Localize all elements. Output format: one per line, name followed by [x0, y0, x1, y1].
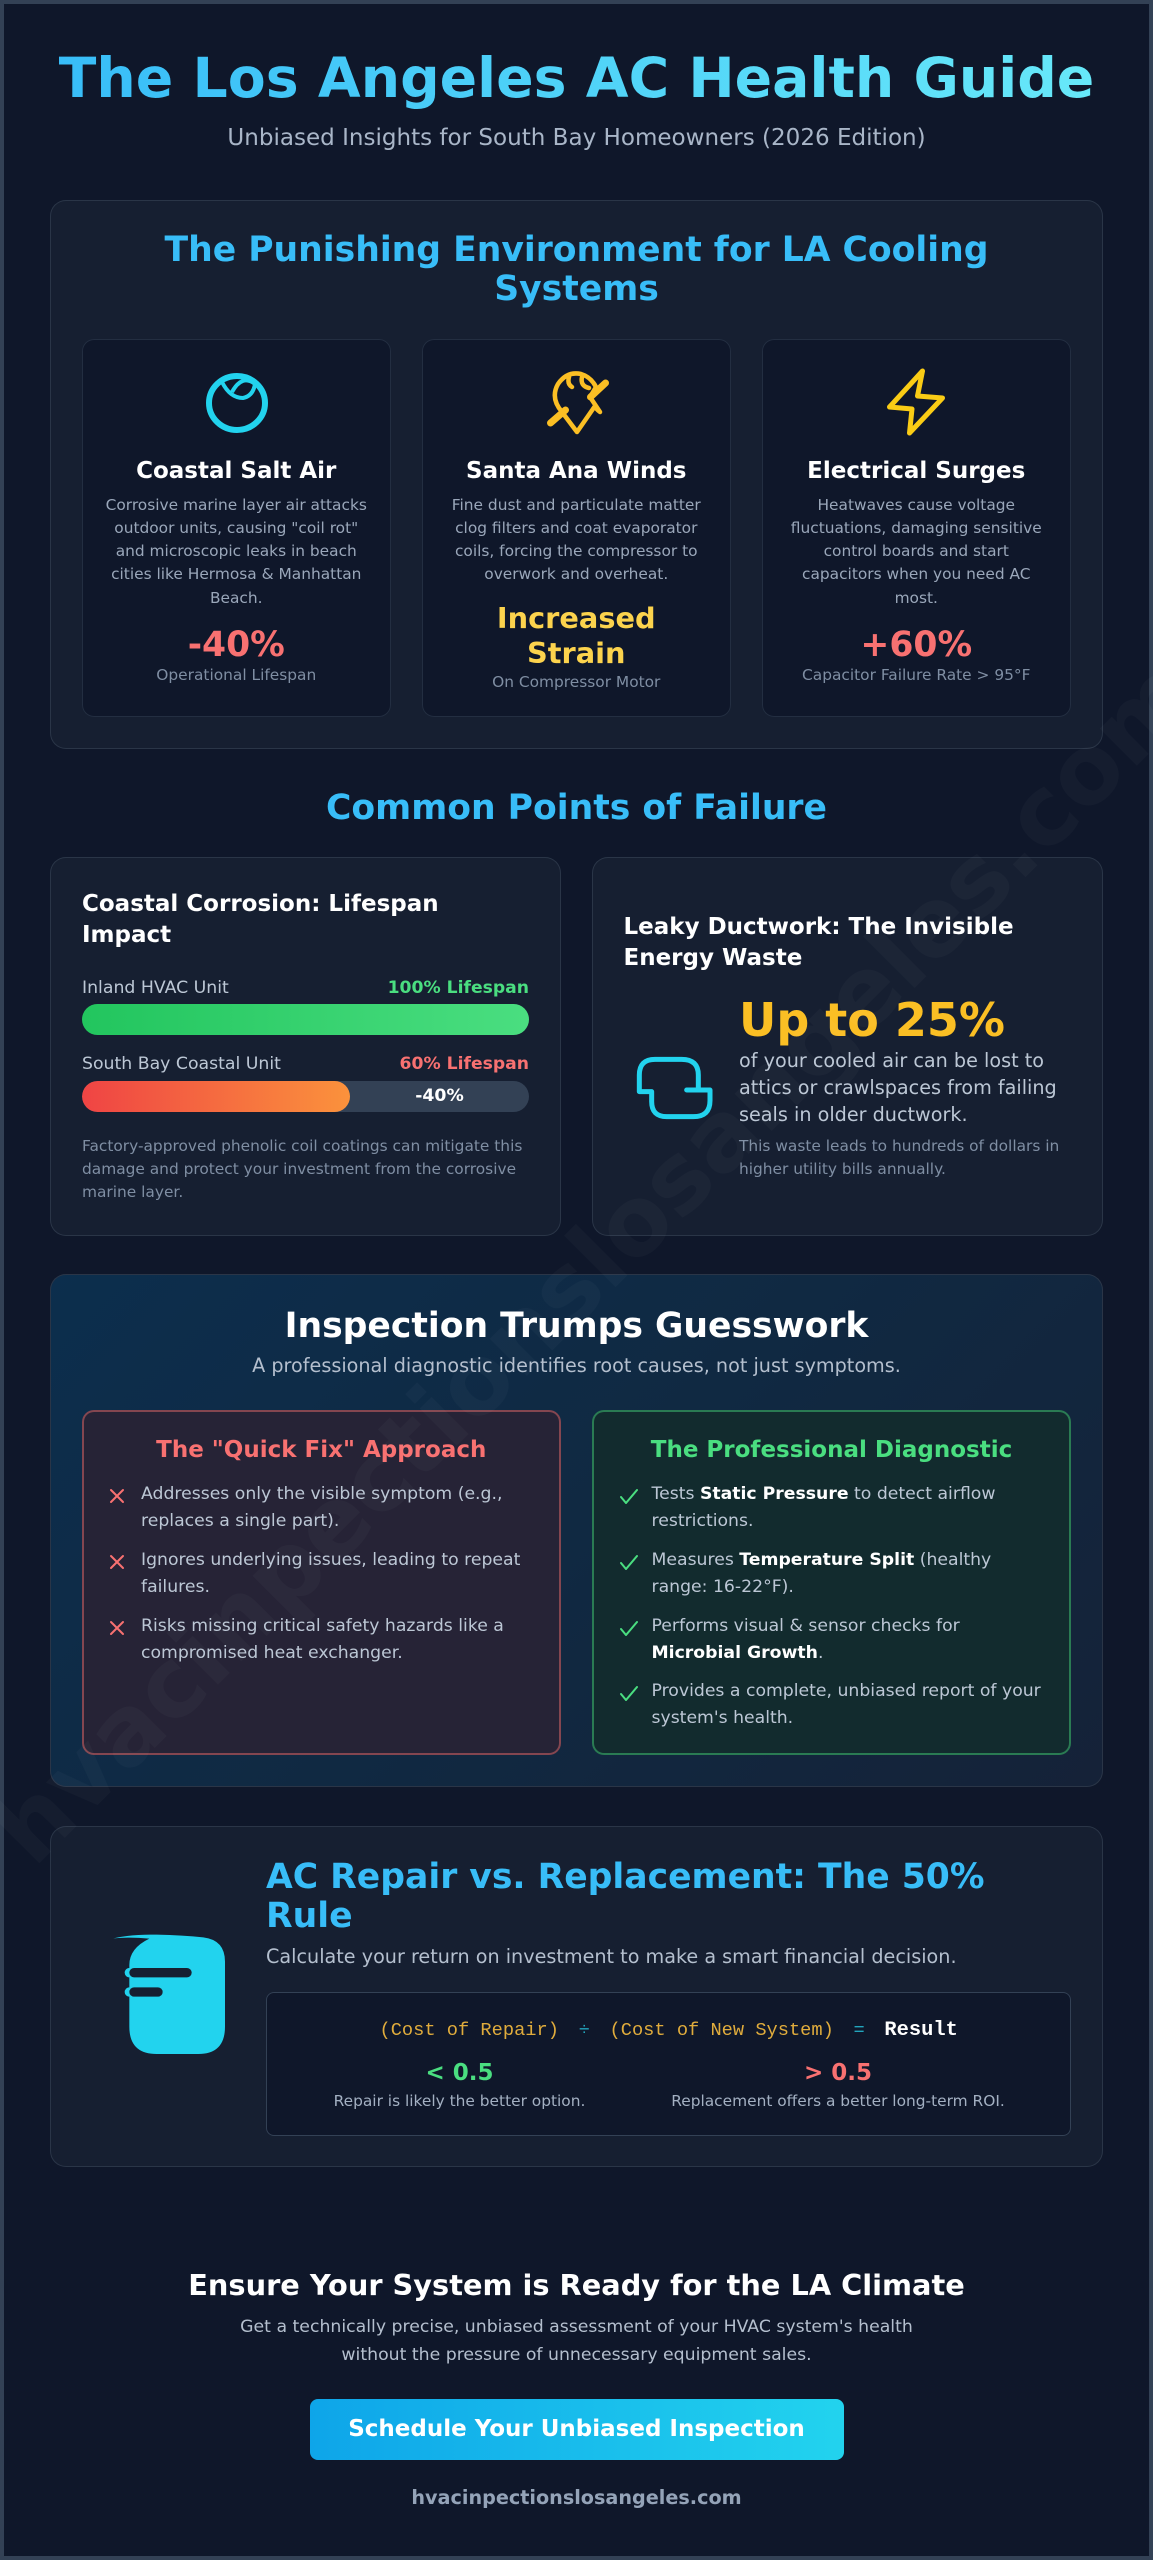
card: professional diagnostic: [592, 1410, 1071, 1755]
item: Tests Static Pressure to detect airflow: [652, 1484, 995, 1504]
value: < 0.5: [425, 2060, 494, 2086]
icon: money / calculator: [114, 1934, 225, 2054]
card title: Electrical Surges: [807, 458, 1025, 484]
card description: capacitors when you need AC: [802, 565, 1030, 583]
card description: fluctuations, damaging sensitive: [791, 519, 1042, 537]
bar label: inland: Inland HVAC Unit: [82, 978, 229, 998]
stat: Increased: [497, 601, 656, 635]
stat: [497, 601, 656, 670]
icon: lightning bolt: [887, 368, 945, 436]
item: restrictions.: [652, 1511, 753, 1531]
card: santa ana winds: [422, 339, 730, 717]
card description: Corrosive marine layer air attacks: [106, 496, 367, 514]
panel: leaky ductwork: [592, 857, 1103, 1236]
description: seals in older ductwork.: [739, 1103, 968, 1126]
item: [620, 1681, 1041, 1728]
heading: punishing environment: [164, 230, 988, 309]
card description: and microscopic leaks in beach: [116, 542, 357, 560]
description: of your cooled air can be lost to: [739, 1049, 1044, 1072]
bar: south bay 60%: [82, 1081, 529, 1112]
heading: punishing environment: The Punishing Environment for LA Cooling: [164, 230, 988, 270]
panel: inspection trumps guesswork: [50, 1274, 1103, 1787]
stat: Strain: [527, 636, 626, 670]
note: [738, 1137, 1059, 1178]
item: system's health.: [652, 1708, 793, 1728]
item: Measures Temperature Split (healthy: [652, 1550, 991, 1570]
card description: Heatwaves cause voltage: [817, 496, 1015, 514]
heading: AC Repair vs. Replacement: The 50%: [266, 1857, 984, 1897]
caption: Repair is likely the better option.: [334, 2092, 585, 2110]
panel title: [624, 914, 1014, 971]
bar value: south bay: 60% Lifespan: [400, 1054, 529, 1074]
call to action heading: Ensure Your System is Ready for the LA Climate: [188, 2268, 965, 2302]
card title: The "Quick Fix" Approach: [156, 1437, 486, 1463]
item: [620, 1484, 995, 1531]
icon: wind: [547, 371, 609, 434]
list: quick fix drawbacks: [110, 1484, 520, 1663]
item: failures.: [141, 1577, 210, 1597]
note: This waste leads to hundreds of dollars in: [739, 1137, 1059, 1155]
stat: -40%: [188, 625, 285, 665]
card description: outdoor units, causing "coil rot": [114, 519, 358, 537]
card description: overwork and overheat.: [484, 565, 668, 583]
item: Risks missing critical safety hazards like a: [141, 1616, 504, 1636]
value: > 0.5: [804, 2060, 872, 2086]
panel title: [82, 891, 439, 948]
bar remainder label: -40%: [415, 1086, 464, 1106]
item: [620, 1550, 991, 1597]
card: electrical surges: [762, 339, 1070, 717]
call to action text: without the pressure of unnecessary equipment sales.: [341, 2344, 812, 2364]
icon: salt air: [206, 373, 268, 433]
panel: punishing environment: [50, 200, 1103, 749]
list: diagnostic steps: [620, 1484, 1041, 1728]
heading: Rule: [266, 1896, 353, 1936]
subtitle: Unbiased Insights for South Bay Homeowners (2026 Edition): [227, 125, 926, 151]
item: Performs visual & sensor checks for: [652, 1616, 960, 1636]
card: quick fix: [82, 1410, 560, 1755]
footer url: hvacinpectionslosangeles.com: [411, 2486, 742, 2509]
card description: Beach.: [210, 589, 263, 607]
card: coastal salt air: [82, 339, 390, 717]
card description: clog filters and coat evaporator: [455, 519, 697, 537]
bar: inland 100%: [82, 1004, 529, 1035]
card title: The Professional Diagnostic: [651, 1437, 1012, 1463]
panel title: Energy Waste: [624, 945, 802, 971]
formula box: [266, 1992, 1071, 2136]
panel title: Coastal Corrosion: Lifespan: [82, 891, 439, 917]
card description: [106, 496, 367, 607]
card description: Fine dust and particulate matter: [452, 496, 701, 514]
bar value: inland: 100% Lifespan: [388, 978, 529, 998]
subheading: A professional diagnostic identifies root causes, not just symptoms.: [252, 1354, 901, 1377]
item: replaces a single part).: [141, 1511, 339, 1531]
call to action text: [240, 2317, 913, 2364]
item: [110, 1616, 504, 1663]
item: Provides a complete, unbiased report of your: [652, 1681, 1041, 1701]
card description: coils, forcing the compressor to: [455, 542, 698, 560]
heading: [266, 1857, 984, 1936]
stat: +60%: [860, 625, 972, 665]
description: attics or crawlspaces from failing: [739, 1076, 1057, 1099]
card description: cities like Hermosa & Manhattan: [111, 565, 361, 583]
card description: [791, 496, 1042, 607]
button: Schedule Your Unbiased Inspection: [348, 2416, 805, 2442]
note: damage and protect your investment from the corrosive: [82, 1160, 516, 1178]
stat label: On Compressor Motor: [492, 673, 660, 691]
button: [310, 2398, 844, 2460]
title: The Los Angeles AC Health Guide: [59, 47, 1094, 111]
card description: [452, 496, 701, 583]
item: [620, 1616, 960, 1663]
result: under 0.5: [334, 2060, 585, 2110]
item: Addresses only the visible symptom (e.g.,: [141, 1484, 502, 1504]
caption: Replacement offers a better long-term ROI.: [671, 2092, 1005, 2110]
item: Microbial Growth.: [652, 1643, 823, 1663]
item: range: 16-22°F).: [652, 1577, 794, 1597]
stat label: Operational Lifespan: [156, 666, 316, 684]
card description: control boards and start: [824, 542, 1009, 560]
card title: Coastal Salt Air: [136, 458, 336, 484]
bar fill: [82, 1081, 350, 1112]
stat label: Capacitor Failure Rate > 95°F: [802, 666, 1030, 684]
bar label: south bay: South Bay Coastal Unit: [82, 1054, 281, 1074]
panel title: Leaky Ductwork: The Invisible: [624, 914, 1014, 940]
panel: coastal corrosion: [50, 857, 560, 1236]
item: compromised heat exchanger.: [141, 1643, 403, 1663]
heading: Inspection Trumps Guesswork: [285, 1306, 868, 1346]
note: marine layer.: [82, 1183, 183, 1201]
note: [82, 1137, 522, 1201]
item: [110, 1484, 502, 1531]
item: Ignores underlying issues, leading to repeat: [141, 1550, 520, 1570]
description: [739, 1049, 1057, 1126]
formula: (Cost of Repair) ÷ (Cost of New System) = Result: [380, 2019, 958, 2042]
heading: common points of failure: Common Points of Failure: [326, 788, 827, 828]
call to action text: Get a technically precise, unbiased assessment of your HVAC system's health: [240, 2317, 913, 2337]
panel: 50% rule: [50, 1826, 1103, 2167]
big stat: Up to 25%: [739, 993, 1005, 1047]
heading: punishing environment: Systems: [494, 269, 659, 309]
item: [110, 1550, 520, 1597]
panel title: Impact: [82, 922, 171, 948]
note: higher utility bills annually.: [739, 1160, 946, 1178]
icon: duct: [636, 1056, 712, 1120]
card title: Santa Ana Winds: [466, 458, 686, 484]
subheading: Calculate your return on investment to make a smart financial decision.: [266, 1945, 957, 1968]
result: over 0.5: [671, 2060, 1005, 2110]
note: Factory-approved phenolic coil coatings can mitigate this: [82, 1137, 522, 1155]
card description: most.: [895, 589, 938, 607]
